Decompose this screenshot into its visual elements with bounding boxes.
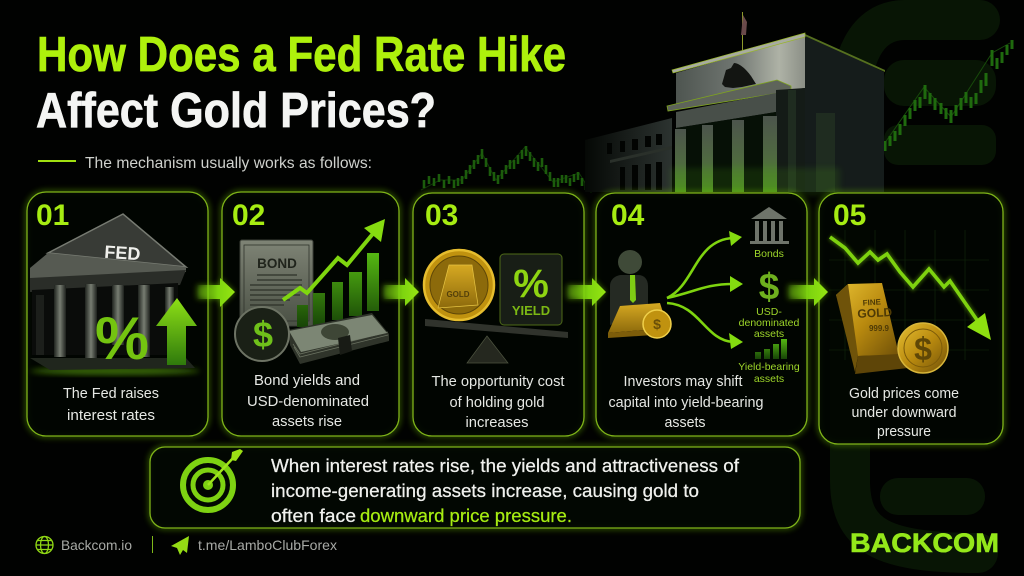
icon: bank [750,207,789,244]
caption 05: pressure [877,423,931,440]
telegram link: t.me/LamboClubForex [198,537,337,553]
callout text: often face [271,505,356,526]
card 03 [413,193,584,436]
column 4 [763,116,777,192]
icon: globe [36,536,53,554]
falling price arrow [829,230,991,360]
caption 04: capital into yield-bearing [608,394,764,411]
candlestick chart: left [421,146,606,192]
arrow 4 to 5 [788,278,828,306]
icon: mini bars [755,339,787,359]
number 05: 05 [833,199,866,232]
callout text: When interest rates rise, the yields and attractiveness of [271,455,740,476]
icon: gold bar and coin: $ [914,331,932,367]
icon: balance with gold and yield: % [513,262,549,306]
side pilaster [788,90,835,192]
label: Yield-bearing assets: assets [754,373,784,385]
number 02: 02 [232,199,265,232]
icon: balance with gold and yield [424,250,568,363]
label: USD-denominated assets: USD- [756,306,782,318]
icon: bond, bars, cash: BOND [257,256,297,271]
flag [741,12,747,50]
caption 02: assets rise [272,413,342,430]
pillars dark recess [676,112,776,192]
icon: investor with gold: $ [653,316,661,332]
caption 03 [432,373,565,431]
caption 02: USD-denominated [247,393,369,410]
green ground light [670,168,840,196]
attic front [676,36,805,106]
caption 03: increases [466,414,528,431]
label: USD-denominated assets: denominated [739,317,800,329]
icon: bond, bars, cash [235,219,389,364]
icon: balance with gold and yield: YIELD [512,303,550,318]
label: Yield-bearing assets: Yield-bearing [738,361,800,373]
icon: dollar: $ [759,266,780,307]
card 02 [222,192,399,436]
caption 01 [63,385,159,424]
caption 05: under downward [852,404,956,421]
candlestick chart: right [776,40,1012,192]
icon: target [183,449,243,510]
callout [150,447,800,528]
card 01 [27,192,208,436]
column 3 [732,120,744,192]
caption 01: interest rates [67,407,155,424]
title [36,28,566,138]
caption 02 [247,372,369,430]
number 03: 03 [425,199,458,232]
caption 03: of holding gold [450,394,544,411]
icon: investor with gold [608,250,671,338]
column 1 [675,129,686,192]
number 01: 01 [36,199,69,232]
callout text: downward price pressure. [360,505,572,526]
label: USD-denominated assets: assets [754,328,784,340]
column 2 [702,125,713,192]
logo: BACKCOM: BACKCOM [850,528,999,558]
title line 1: How Does a Fed Rate Hike [37,28,566,82]
eagle [722,63,756,88]
title line 2: Affect Gold Prices? [36,84,436,138]
icon: bond, bars, cash: $ [253,314,273,355]
callout text: income-generating assets increase, causing gold to [271,480,699,501]
right block side [805,34,884,192]
caption 04 [608,373,764,431]
caption 04: Investors may shift [624,373,743,390]
footer links [36,536,337,555]
caption 05 [849,385,959,440]
label: Bonds: Bonds [754,248,784,260]
number 04: 04 [611,199,645,232]
icon: gold bar and coin: GOLD [857,305,893,321]
label: USD-denominated assets [739,306,800,340]
cornice [667,80,791,111]
arrow 3 to 4 [567,278,606,306]
caption 05: Gold prices come [849,385,959,402]
caption 03: The opportunity cost [432,373,565,390]
icon: Fed building [30,214,200,375]
caption 04: assets [664,414,706,431]
callout text [271,455,740,526]
caption 01: The Fed raises [63,385,159,402]
background logo watermark [850,20,996,553]
Federal Reserve building [585,12,885,196]
label: Yield-bearing assets [738,361,800,385]
icon: Fed building: FED [104,242,141,264]
icon: gold bar and coin: FINE [862,297,882,308]
website: Backcom.io [61,537,132,553]
icon: telegram [171,536,189,555]
arrow 1 to 2 [197,278,235,307]
arrow 2 to 3 [383,278,419,306]
arrows to assets [667,231,743,349]
entablature [676,93,776,128]
subtitle: The mechanism usually works as follows: [85,155,372,172]
caption 02: Bond yields and [254,372,360,389]
icon: gold bar and coin: 999.9 [869,324,890,333]
icon: balance with gold and yield: GOLD [446,290,470,299]
card 05 [819,193,1003,444]
card 04 [596,193,807,436]
left wing [585,118,672,192]
icon: Fed building: % [95,305,149,372]
icon: gold bar and coin [836,283,948,374]
